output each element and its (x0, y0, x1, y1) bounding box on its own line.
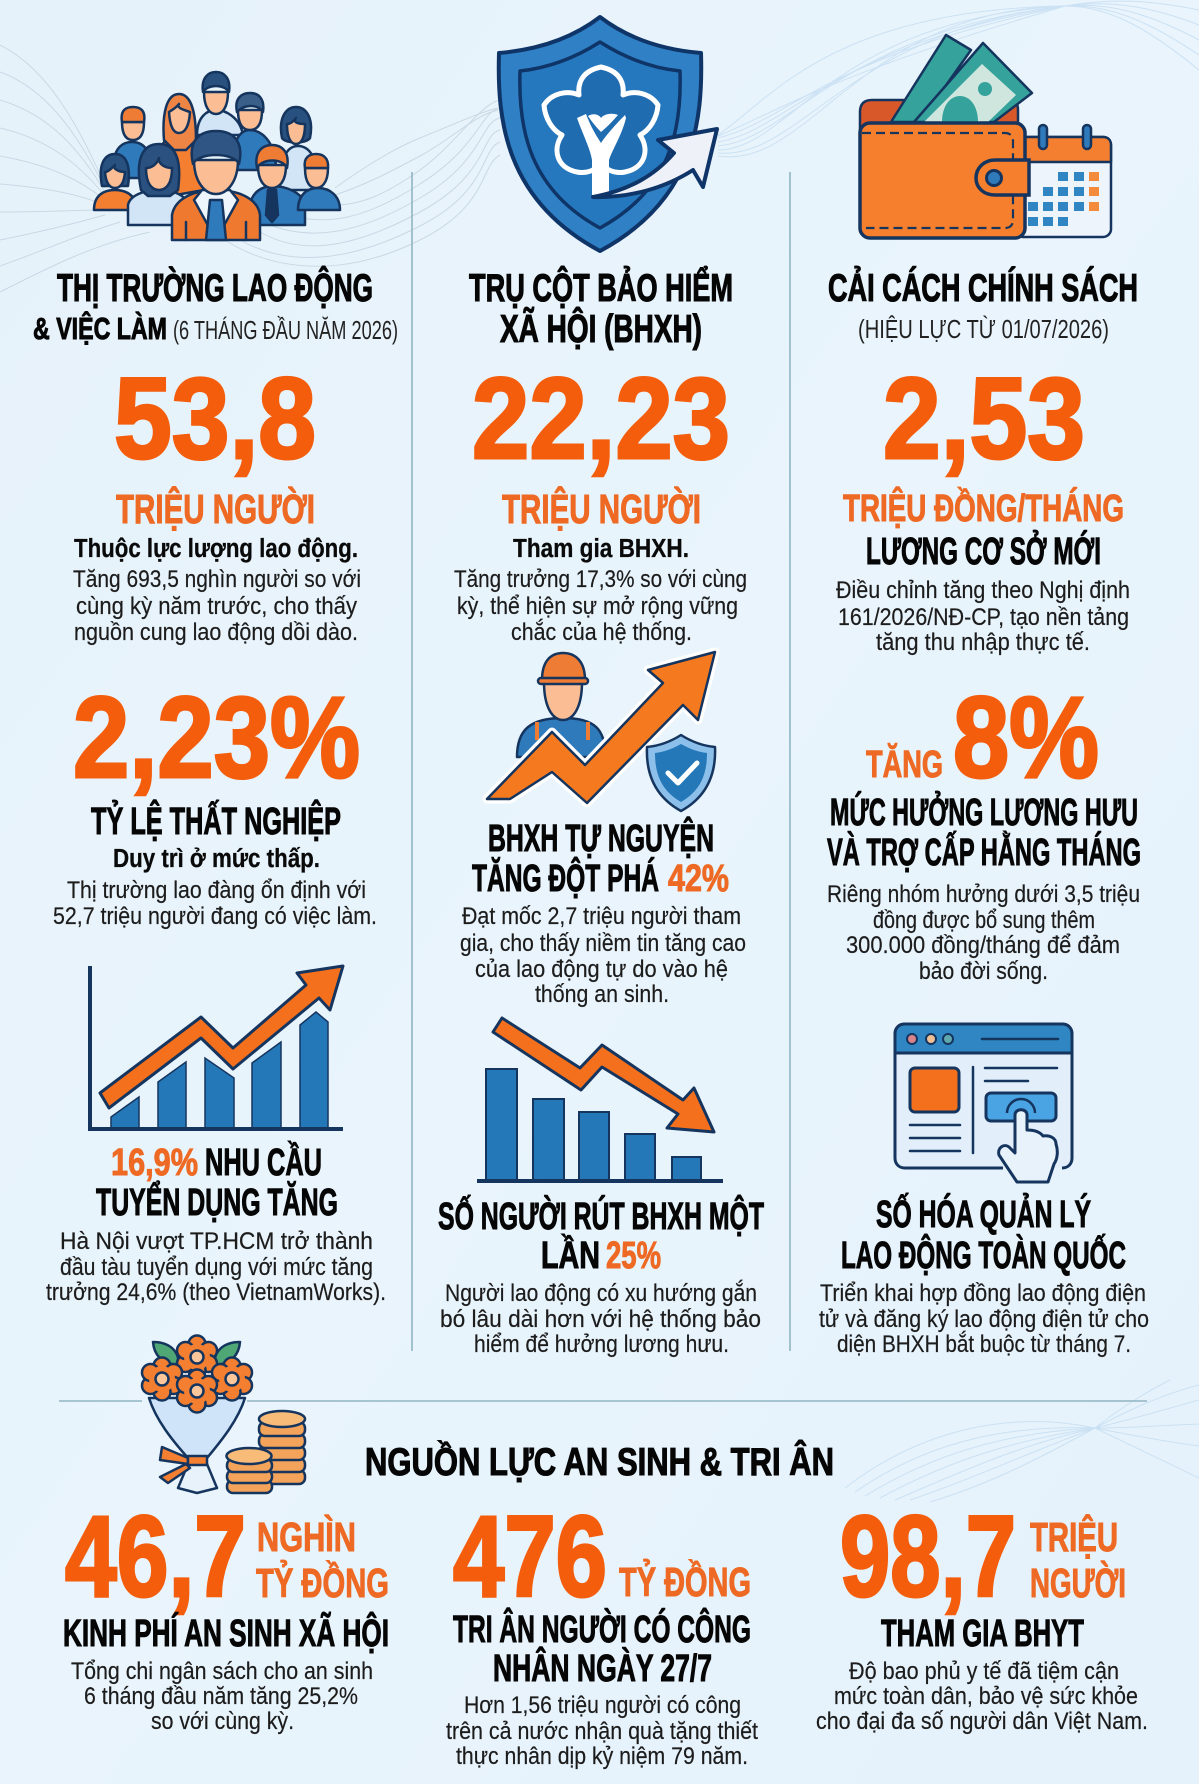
text: recruitment detail (46, 1228, 386, 1306)
stat: pension up 8%: 8% (953, 674, 1099, 802)
heading: labour market: THỊ TRƯỜNG LAO ĐỘNG (57, 265, 373, 310)
text: base salary detail (836, 577, 1130, 656)
text: base salary detail: tăng thu nhập thực tế. (876, 629, 1090, 656)
stat: 476 billion: TỶ ĐỒNG (619, 1559, 751, 1605)
text: insurance participants: Tăng trưởng 17,3% so với cùng (454, 566, 747, 593)
heading: one-time withdrawals: SỐ NGƯỜI RÚT BHXH MỘT (438, 1193, 764, 1238)
text: digital management detail: diện BHXH bắt buộc từ tháng 7. (837, 1331, 1131, 1358)
stat: 22,23 million: TRIỆU NGƯỜI (502, 486, 701, 532)
text: health insurance detail: cho đại đa số người dân Việt Nam. (816, 1708, 1148, 1735)
stat: 53,8 million: TRIỆU NGƯỜI (116, 486, 315, 532)
text: digital management detail (819, 1280, 1149, 1358)
heading: labour market (33, 265, 398, 346)
text: insurance participants: chắc của hệ thống. (511, 619, 692, 646)
text: labour force: cùng kỳ năm trước, cho thấy (76, 593, 358, 620)
heading: voluntary insurance (472, 816, 729, 900)
heading: one-time withdrawals (438, 1193, 764, 1277)
stat: 46,7 thousand billion: TỶ ĐỒNG (256, 1560, 389, 1606)
panel: social insurance column (438, 17, 764, 1358)
icon: group of workers (94, 72, 340, 240)
text: withdrawal detail (440, 1280, 761, 1358)
heading: social insurance (469, 265, 733, 351)
panel: labour market column (33, 72, 398, 1306)
heading: recruitment demand (96, 1140, 338, 1224)
chart: falling bars with arrow (477, 1018, 723, 1181)
text: unemployment detail (53, 845, 377, 930)
text: voluntary insurance detail (460, 903, 746, 1008)
heading: digital labour management: SỐ HÓA QUẢN LÝ (876, 1191, 1091, 1236)
text: digital management detail: Triển khai hợp đồng lao động điện (820, 1280, 1146, 1307)
heading: labour market: & VIỆC LÀM (33, 310, 167, 346)
text: pension detail (827, 881, 1140, 985)
text: unemployment detail: Duy trì ở mức thấp. (113, 845, 320, 873)
text: labour force: nguồn cung lao động dồi dào. (74, 619, 358, 646)
text: unemployment detail: 52,7 triệu người đang có việc làm. (53, 903, 377, 930)
stat: 98,7 million: NGƯỜI (1030, 1560, 1126, 1606)
text: base salary detail: 161/2026/NĐ-CP, tạo nền tảng (838, 604, 1129, 631)
text: gratitude detail: thực nhân dịp kỷ niệm 79 năm. (456, 1743, 748, 1770)
text: gratitude detail: Hơn 1,56 triệu người có công (464, 1692, 741, 1719)
heading: voluntary insurance: TĂNG ĐỘT PHÁ (472, 855, 659, 900)
stat: 2,53 million per month (843, 355, 1124, 573)
text: pension detail: bảo đời sống. (919, 958, 1048, 985)
heading: voluntary insurance: BHXH TỰ NGUYỆN (488, 816, 714, 860)
text: recruitment detail: Hà Nội vượt TP.HCM trở thành (60, 1228, 373, 1255)
heading: one-time withdrawals: 25% (606, 1235, 661, 1277)
heading: social insurance: TRỤ CỘT BẢO HIỂM (469, 265, 733, 310)
heading: social insurance: XÃ HỘI (BHXH) (500, 306, 702, 351)
panel: policy reform column (819, 35, 1149, 1358)
text: recruitment detail: trưởng 24,6% (theo VietnamWorks). (46, 1279, 386, 1306)
stat: pension up 8% (866, 674, 1099, 802)
stat: 53,8 million: 53,8 (114, 355, 316, 483)
text: voluntary insurance detail: gia, cho thấy niềm tin tăng cao (460, 930, 746, 957)
text: labour force (73, 535, 361, 646)
chart: rising bars with arrow (90, 966, 343, 1129)
text: withdrawal detail: Người lao động có xu hướng gắn (445, 1280, 757, 1307)
stat: 53,8 million (114, 355, 316, 532)
heading: labour market: (6 THÁNG ĐẦU NĂM 2026) (173, 315, 398, 345)
icon: bouquet and coins (142, 1336, 305, 1493)
panel: social security resources (63, 1336, 1148, 1770)
text: withdrawal detail: bó lâu dài hơn với hệ thống bảo (440, 1306, 761, 1333)
heading: resources and gratitude: NGUỒN LỰC AN SINH & TRI ÂN (365, 1440, 834, 1484)
text: health insurance detail: mức toàn dân, bảo vệ sức khỏe (834, 1683, 1138, 1710)
text: health insurance detail: Độ bao phủ y tế đã tiệm cận (849, 1658, 1119, 1685)
text: voluntary insurance detail: của lao động tự do vào hệ (475, 956, 728, 983)
text: pension detail: đồng được bổ sung thêm (873, 907, 1095, 934)
text: labour force: Tăng 693,5 nghìn người so với (73, 566, 361, 593)
text: base salary detail: Điều chỉnh tăng theo Nghị định (836, 577, 1130, 604)
stat: 46,7 thousand billion: KINH PHÍ AN SINH XÃ HỘI (63, 1610, 389, 1655)
heading: pension and allowance (827, 790, 1141, 874)
stat: 98,7 million: 98,7 (840, 1493, 1016, 1621)
text: health insurance detail (816, 1658, 1148, 1735)
text: voluntary insurance detail: Đạt mốc 2,7 triệu người tham (462, 903, 741, 930)
text: insurance participants: kỳ, thể hiện sự mở rộng vững (457, 593, 738, 620)
stat: 46,7 thousand billion: NGHÌN (257, 1514, 356, 1560)
text: pension detail: 300.000 đồng/tháng để đảm (846, 932, 1120, 959)
stat: 476 billion (453, 1493, 751, 1690)
stat: unemployment 2,23%: 2,23% (73, 674, 360, 802)
heading: recruitment demand: 16,9% (111, 1142, 198, 1184)
text: pension detail: Riêng nhóm hưởng dưới 3,5 triệu (827, 881, 1140, 908)
text: unemployment detail: Thị trường lao đàng ổn định với (67, 877, 366, 904)
text: gratitude detail: trên cả nước nhận quà tặng thiết (446, 1718, 758, 1745)
icon: social insurance shield with arrow (499, 17, 717, 251)
heading: policy reform: (HIỆU LỰC TỪ 01/07/2026) (858, 314, 1109, 344)
stat: 22,23 million (472, 355, 730, 532)
text: recruitment detail: đầu tàu tuyển dụng với mức tăng (60, 1254, 373, 1281)
stat: 22,23 million: 22,23 (472, 355, 730, 483)
text: social security spending: so với cùng kỳ. (151, 1708, 294, 1735)
text: labour force: Thuộc lực lượng lao động. (74, 535, 358, 563)
stat: 2,53 million per month: 2,53 (883, 355, 1085, 483)
heading: recruitment demand: NHU CẦU (205, 1140, 322, 1184)
stat: 98,7 million: TRIỆU (1030, 1514, 1118, 1560)
text: insurance participants: Tham gia BHXH. (513, 535, 689, 563)
heading: voluntary insurance: 42% (668, 858, 729, 900)
icon: browser window with pointer hand (895, 1024, 1072, 1182)
stat: pension up 8%: TĂNG (866, 742, 943, 786)
stat: unemployment 2,23%: TỶ LỆ THẤT NGHIỆP (91, 799, 341, 843)
text: voluntary insurance detail: thống an sinh. (535, 981, 669, 1008)
stat: unemployment 2,23% (73, 674, 360, 843)
text: social security spending: 6 tháng đầu năm tăng 25,2% (84, 1683, 358, 1710)
text: social security spending: Tổng chi ngân sách cho an sinh (71, 1658, 373, 1685)
stat: 476 billion: 476 (453, 1493, 607, 1621)
stat: 98,7 million (840, 1493, 1126, 1655)
heading: policy reform (828, 266, 1138, 344)
heading: digital labour management (841, 1191, 1126, 1277)
icon: wallet, cash and calendar (860, 35, 1111, 238)
icon: worker, rising arrow and shield (487, 652, 715, 811)
stat: 476 billion: TRI ÂN NGƯỜI CÓ CÔNG (453, 1606, 751, 1651)
text: social security spending (71, 1658, 373, 1735)
stat: 476 billion: NHÂN NGÀY 27/7 (493, 1646, 712, 1690)
text: digital management detail: tử và đăng ký lao động điện tử cho (819, 1306, 1149, 1333)
text: gratitude detail (446, 1692, 758, 1770)
stat: 46,7 thousand billion: 46,7 (65, 1493, 246, 1621)
text: withdrawal detail: hiểm để hưởng lương hưu. (474, 1331, 729, 1358)
stat: 46,7 thousand billion (63, 1493, 389, 1655)
heading: recruitment demand: TUYỂN DỤNG TĂNG (96, 1179, 338, 1224)
stat: 98,7 million: THAM GIA BHYT (881, 1613, 1084, 1655)
heading: one-time withdrawals: LẦN (541, 1233, 600, 1277)
text: insurance participants (454, 535, 747, 646)
